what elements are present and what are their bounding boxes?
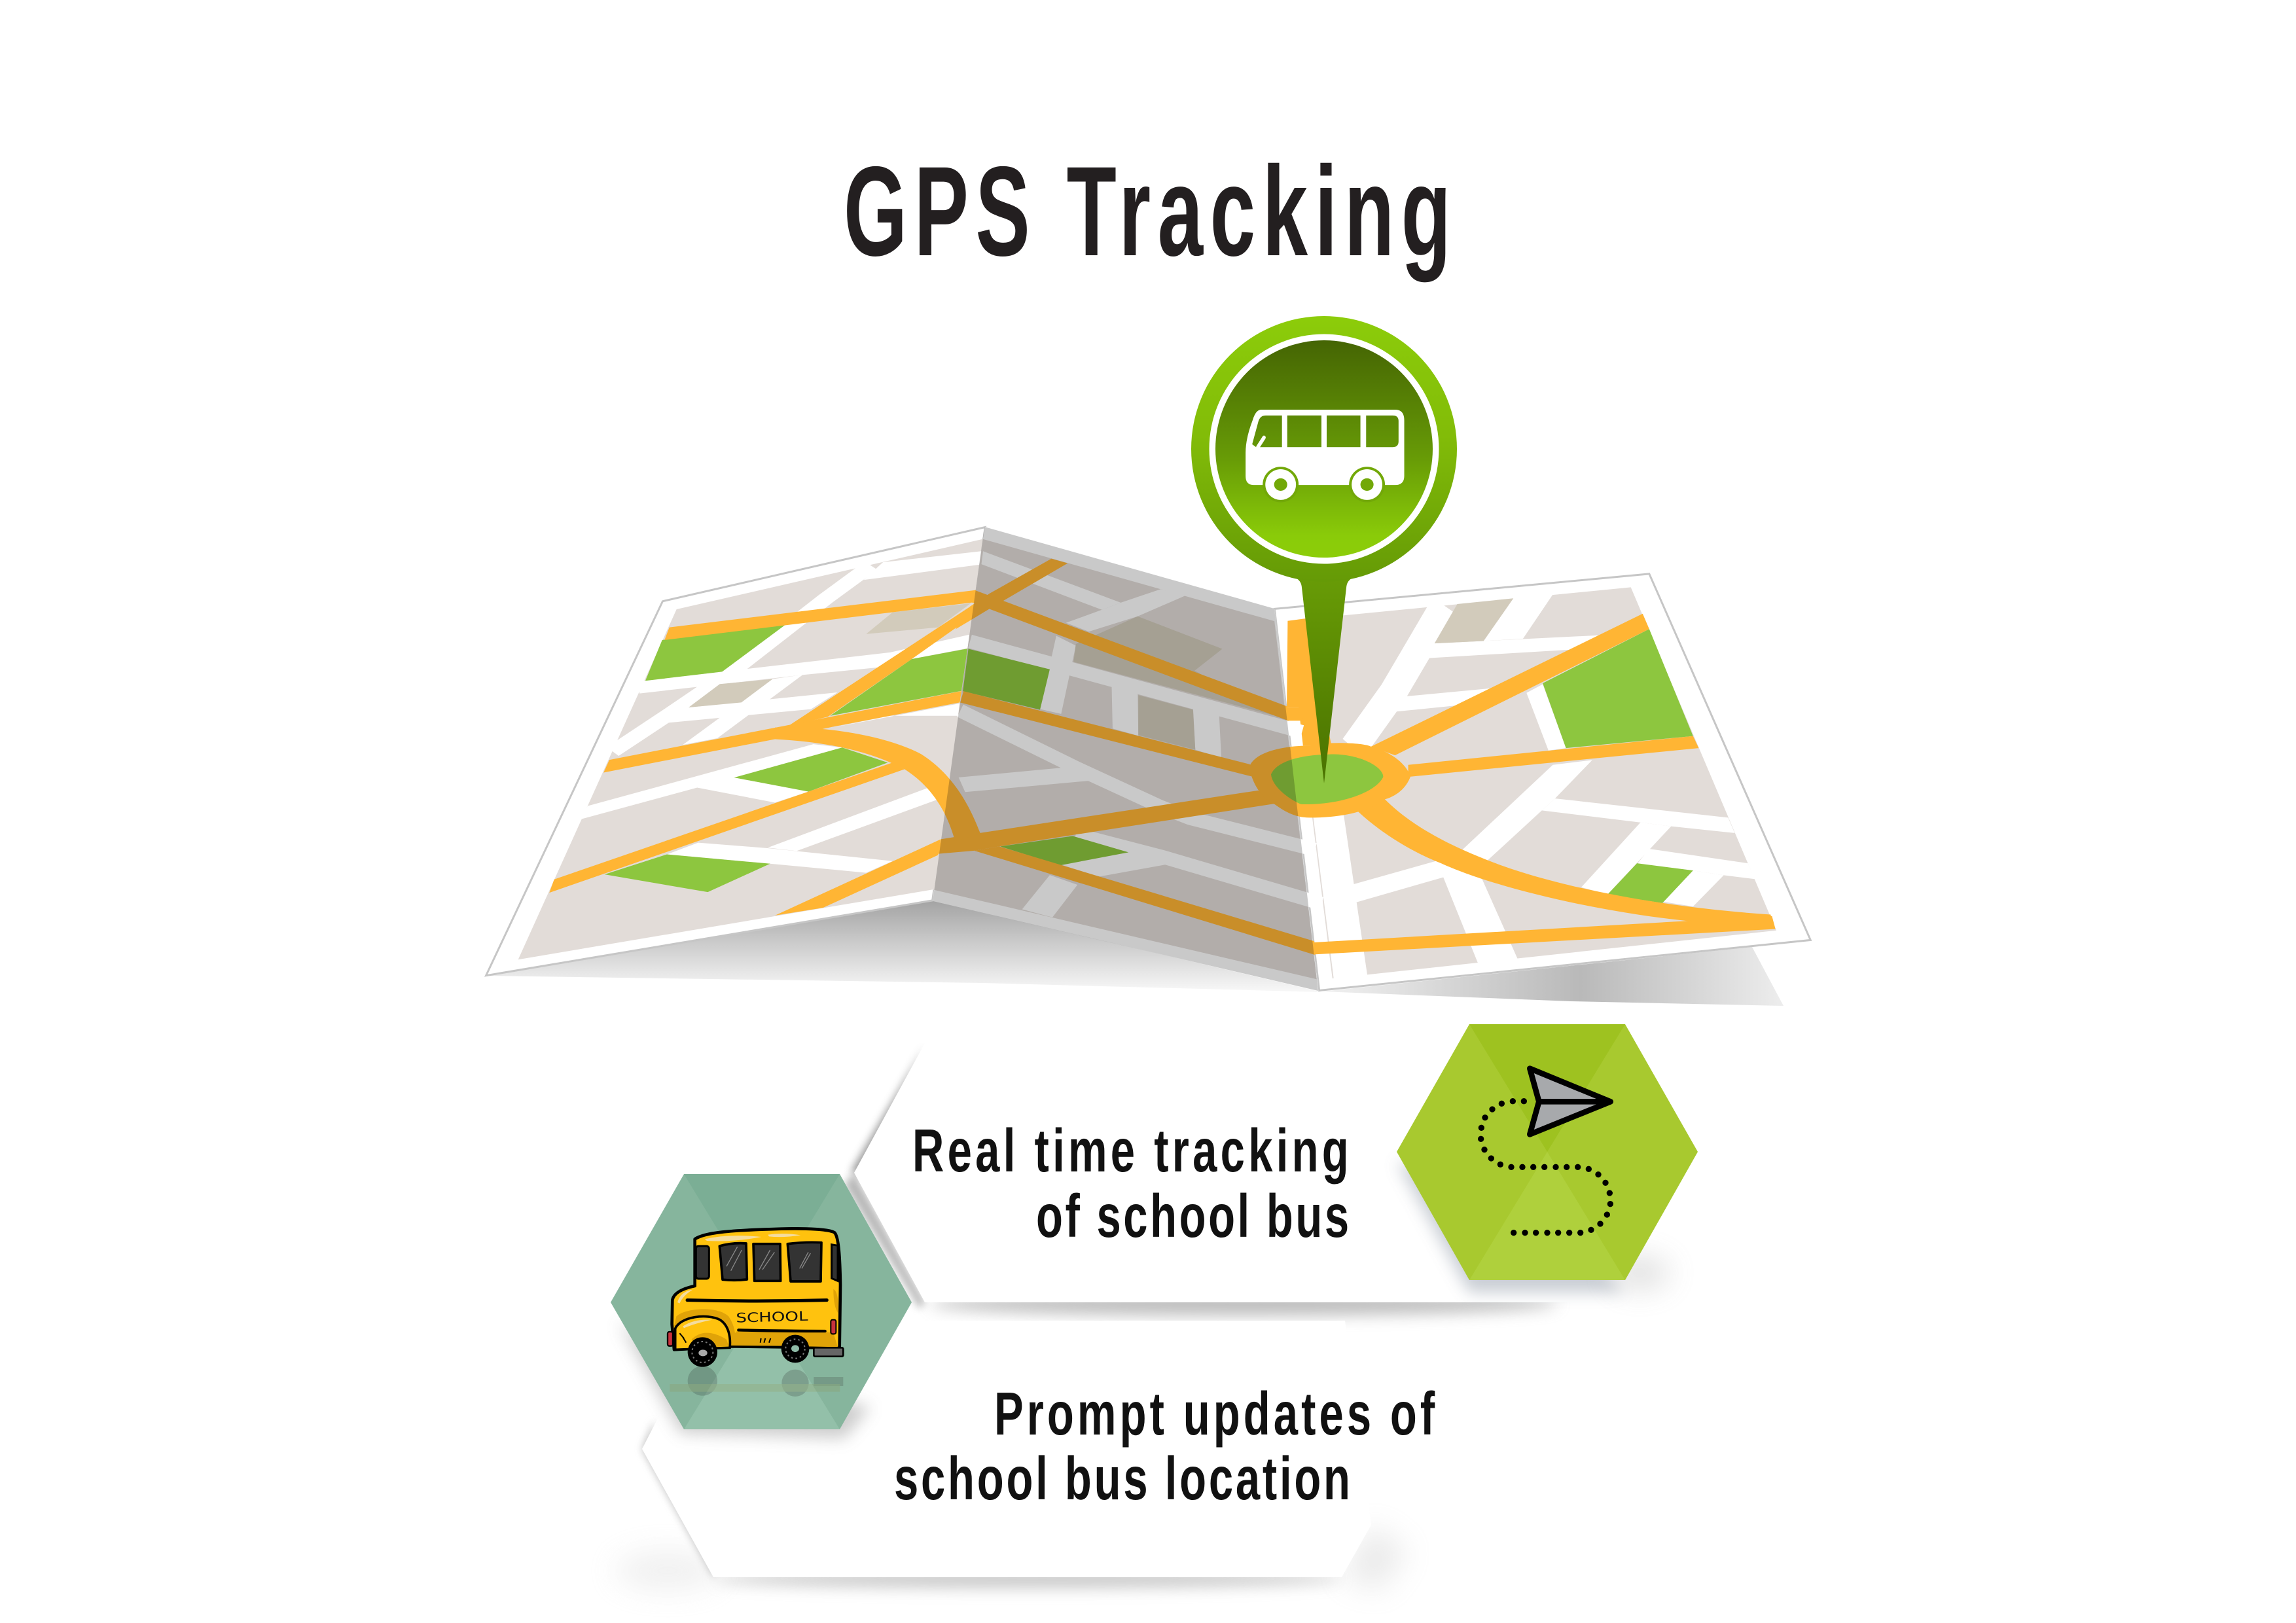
map panel: left: [486, 527, 985, 976]
map panel: centre fold: [933, 527, 1321, 991]
panel: prompt updates of school bus location: [615, 1292, 1558, 1590]
icon: bus: [1246, 410, 1405, 503]
text: prompt updates: school bus location: [894, 1445, 1350, 1513]
curved road across the fold: [775, 727, 980, 841]
icon: school bus: [668, 1228, 843, 1397]
map panel: right: [1274, 574, 1810, 990]
roundabout: [1249, 743, 1410, 817]
icon: paper plane with dotted route: [1478, 1069, 1613, 1236]
location pin with bus icon: [1191, 316, 1457, 783]
pin face: [1215, 340, 1433, 558]
text: prompt updates: Prompt updates of: [994, 1380, 1435, 1448]
bus label: SCHOOL: [736, 1308, 809, 1326]
panel: real time tracking of school bus: [844, 1043, 1604, 1309]
hexagon: green with route arrow: [1397, 1024, 1698, 1293]
bus reflection: [670, 1366, 843, 1397]
pin pointer: [1288, 576, 1360, 783]
text: real time tracking: of school bus: [1036, 1183, 1349, 1251]
map fold shading overlay: [933, 527, 1318, 991]
title: GPS Tracking: [844, 140, 1451, 283]
dotted route: [1478, 1098, 1613, 1236]
panel shadows: [615, 1292, 1558, 1590]
map shadow: [488, 901, 1784, 1006]
text: real time tracking: [912, 1117, 1349, 1251]
folded street map: [486, 527, 1810, 1006]
pin ring: [1191, 316, 1457, 582]
hexagon: teal with school bus: [611, 1174, 912, 1438]
text: prompt updates: [894, 1380, 1435, 1513]
text: real time tracking: Real time tracking: [912, 1117, 1349, 1185]
